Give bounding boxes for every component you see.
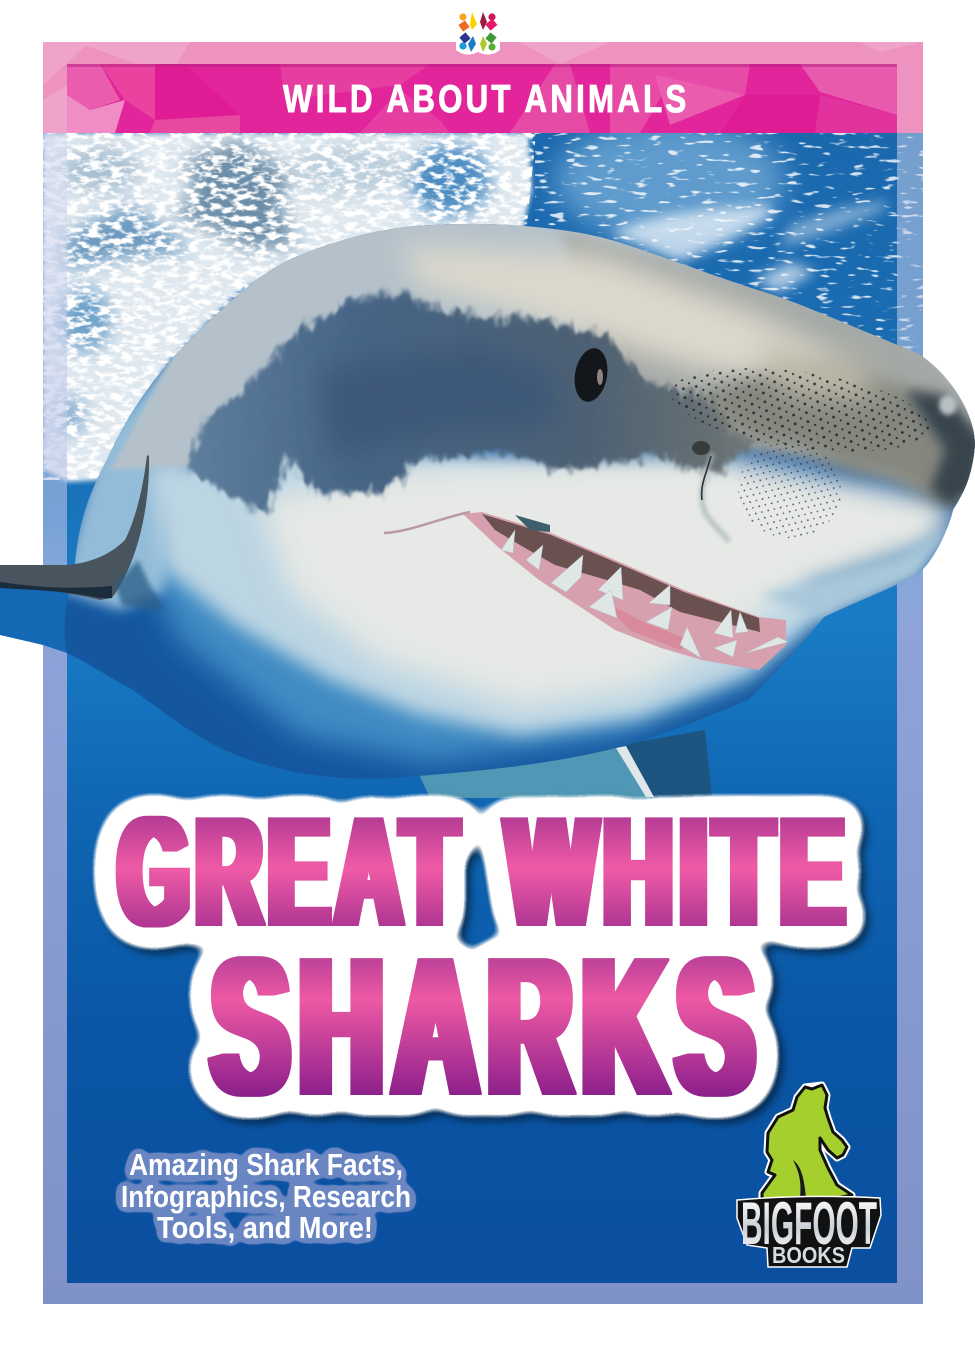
lighter water glow <box>555 120 785 240</box>
head underlay grey <box>110 215 975 500</box>
outer facets <box>43 42 923 133</box>
snout grey band <box>700 375 972 507</box>
leg gap <box>793 1160 806 1198</box>
logo petals <box>458 12 497 52</box>
nose highlight <box>939 395 957 415</box>
nose dark <box>905 390 975 507</box>
pectoral fin <box>0 455 165 610</box>
shark body <box>50 210 975 800</box>
header band <box>43 42 923 133</box>
ampullae upper <box>671 368 929 452</box>
underwater photo background <box>43 120 923 1304</box>
publisher logo: bigfoot books <box>737 1085 881 1268</box>
head right underlay <box>560 230 975 500</box>
foam texture <box>43 133 536 480</box>
title line one: GREAT <box>119 785 465 958</box>
ampullae lower <box>738 442 842 538</box>
fin base marks <box>115 560 165 610</box>
left flank pale blue <box>68 340 190 618</box>
frame band <box>43 133 923 1304</box>
logo word books: BOOKS <box>772 1242 845 1268</box>
fin black underside <box>0 582 112 598</box>
eye <box>571 346 611 404</box>
bigfoot white halo <box>762 1085 852 1200</box>
snout underside <box>760 525 950 620</box>
title <box>119 785 852 1136</box>
belly mid blue <box>152 559 814 774</box>
panel facets <box>67 64 897 133</box>
upper lip spot <box>515 515 550 532</box>
nostril <box>692 441 710 455</box>
head top cream <box>400 245 840 385</box>
gill fold <box>702 455 728 540</box>
gums <box>463 512 786 670</box>
belly pale <box>150 440 830 735</box>
subtitle: Tools, and More! <box>157 1210 373 1245</box>
logo backing <box>737 1196 881 1267</box>
subtitle: Infographics, Research <box>121 1179 411 1214</box>
shark <box>0 210 975 800</box>
body base deep blue <box>50 210 975 800</box>
fin grey top <box>0 455 149 600</box>
dorsal dark patch <box>187 293 756 513</box>
fin blue underside <box>0 578 160 690</box>
subtitle <box>121 1147 411 1245</box>
bigfoot silhouette <box>762 1085 852 1200</box>
logo halo <box>456 36 500 55</box>
teeth <box>501 530 788 658</box>
subtitle: Amazing Shark Facts, <box>129 1147 403 1182</box>
snout tan <box>750 345 880 400</box>
gum reds <box>600 600 690 650</box>
series title: WILD ABOUT ANIMALS <box>283 78 686 121</box>
mouth <box>384 512 788 670</box>
publisher flower logo <box>456 12 500 55</box>
dorsal deep shadow <box>320 352 554 448</box>
fold line <box>702 456 711 500</box>
foam right patches <box>610 200 890 292</box>
inner mouth <box>482 514 760 632</box>
belly white <box>260 450 955 705</box>
panel top shadow <box>67 64 897 67</box>
inner magenta panel <box>67 64 897 133</box>
lip crease <box>384 512 470 533</box>
ripple texture right <box>535 133 923 350</box>
outer pink border <box>43 42 923 133</box>
sea foam left <box>43 133 532 482</box>
grey water patches <box>58 140 490 435</box>
lower fin <box>417 730 712 798</box>
